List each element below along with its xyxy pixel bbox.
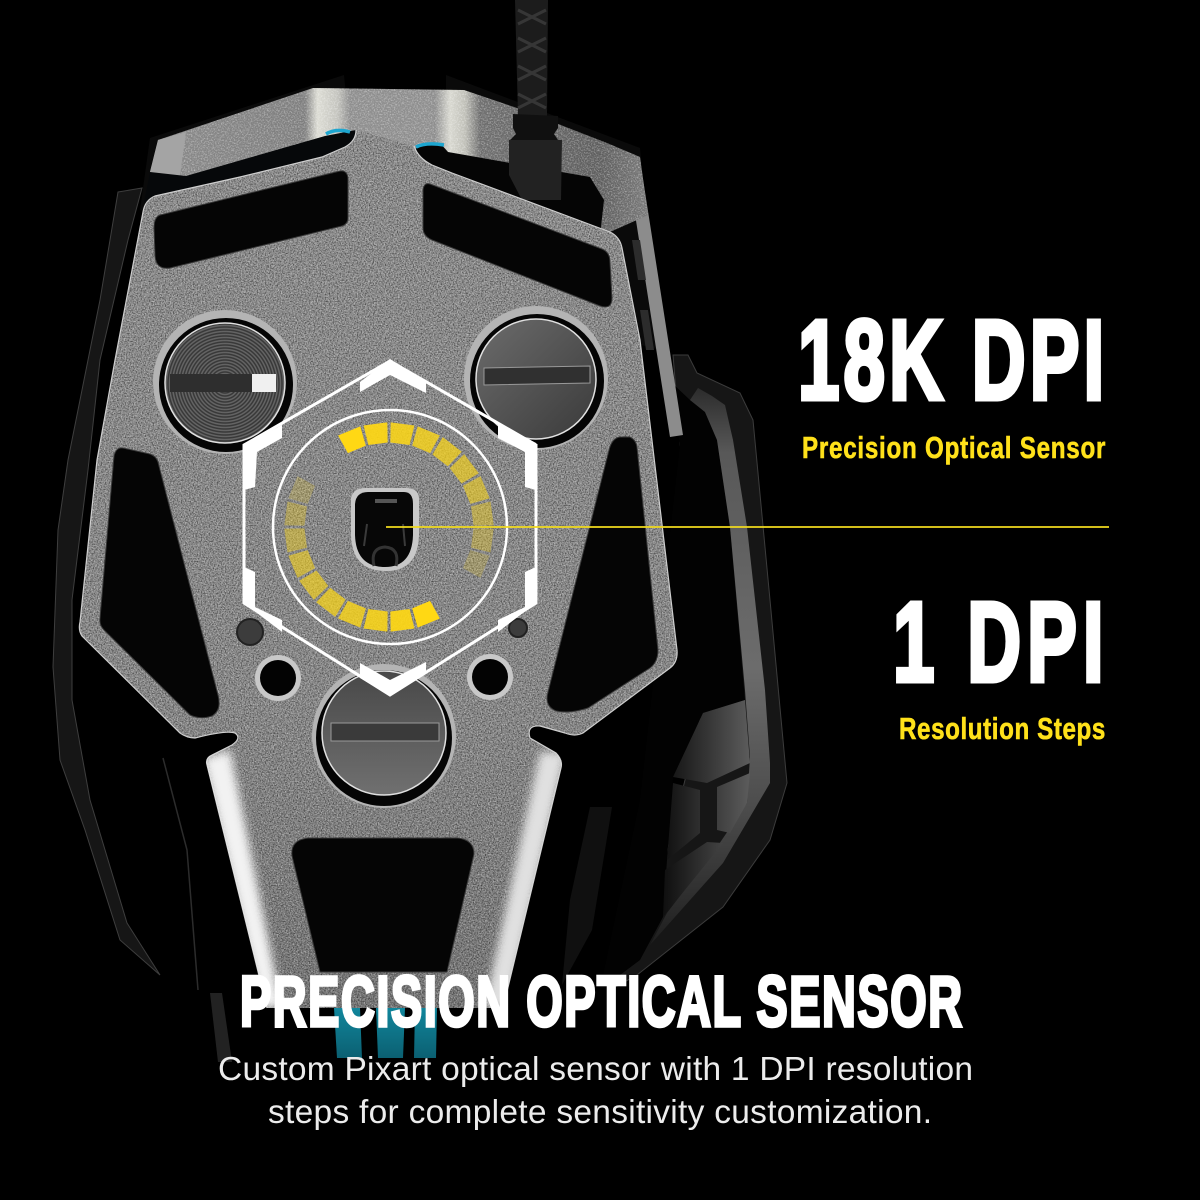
screw: top right [464, 306, 608, 450]
screw: top left [153, 310, 297, 454]
cable and connector [509, 0, 562, 200]
callout leader line [386, 526, 1109, 528]
hexagon thick bottom chevron [360, 662, 426, 696]
right side metal strip [626, 157, 683, 437]
title: PRECISION OPTICAL SENSOR [240, 962, 962, 1041]
hexagon thin outline [244, 361, 536, 695]
screw: bottom centre [312, 664, 456, 808]
mouse body: left side shell [53, 188, 232, 1062]
hexagon right corners [498, 423, 536, 632]
sensor circle [273, 410, 507, 644]
optical sensor window [351, 488, 419, 571]
switch openings with teal accents [144, 130, 604, 236]
plate rim highlight [79, 130, 677, 1008]
rear black housing behind plate [140, 75, 660, 350]
lower arc ticks [284, 476, 440, 632]
hex grip panels [663, 700, 750, 917]
description text: Custom Pixart optical sensor with 1 DPI resolution [218, 1051, 973, 1088]
stat label: Precision Optical Sensor: Precision Optical Sensor [802, 430, 1106, 465]
description text [218, 1051, 973, 1131]
stat: 18K DPI: 18K DPI [798, 297, 1104, 424]
stat label: Resolution Steps: Resolution Steps [899, 711, 1105, 746]
lower plate highlights [203, 750, 566, 1008]
teal LED bars [334, 1008, 437, 1058]
upper metal bridge [150, 88, 648, 232]
DPI tick ring [284, 422, 494, 632]
mouse illustration [53, 0, 787, 1062]
main metal plate [70, 125, 690, 1015]
mouse body: right side shell [562, 355, 787, 990]
glide pad cut-outs [100, 171, 658, 972]
hexagon left corners [244, 425, 282, 632]
hexagon sensor graphic [244, 359, 536, 696]
hexagon thick top chevron [360, 359, 426, 393]
description text: steps for complete sensitivity customization. [268, 1094, 932, 1131]
upper arc ticks [338, 422, 494, 578]
adjustment holes [237, 619, 527, 701]
stat: 1 DPI: 1 DPI [893, 579, 1104, 706]
